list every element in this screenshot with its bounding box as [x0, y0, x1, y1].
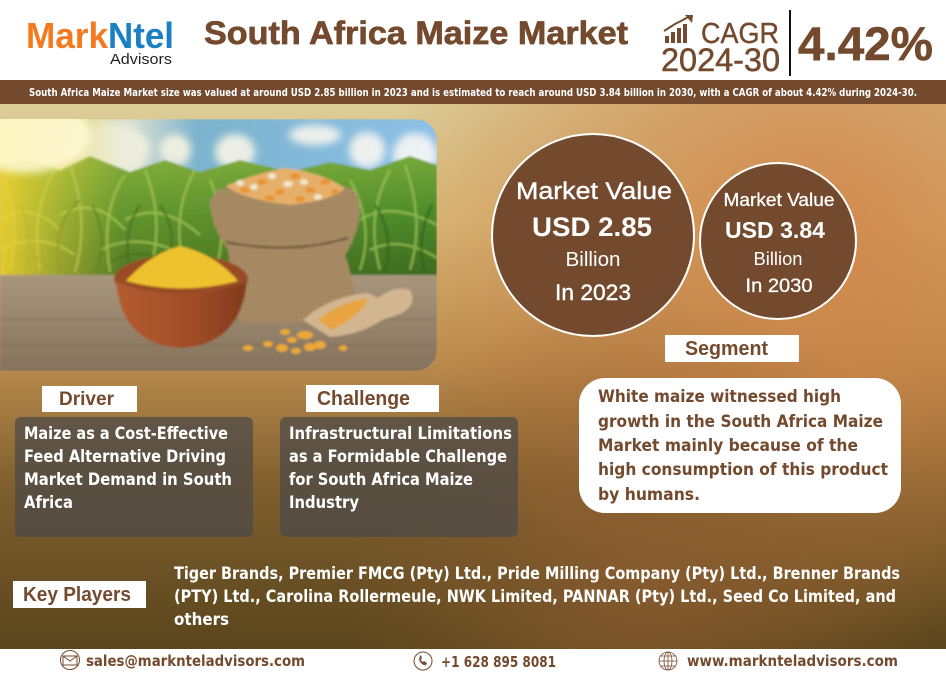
email address: sales@marknteladvisors.com [86, 652, 305, 670]
challenge panel: Industry [289, 493, 359, 513]
key players text: others [174, 610, 229, 630]
sack [210, 180, 360, 323]
photo: maize field, sack, bowl and scoop [0, 97, 437, 371]
bowl [113, 256, 249, 296]
logo: MarkNtel Advisors: Ntel [108, 15, 174, 56]
driver panel: Africa [24, 493, 73, 513]
driver panel [15, 417, 253, 537]
circle: market value 2030 [700, 163, 856, 319]
segment text panel: by humans. [598, 485, 700, 505]
logo: MarkNtel Advisors: Mark [26, 15, 109, 56]
footer [0, 649, 946, 674]
CAGR label: CAGR [701, 18, 779, 50]
challenge panel: for South Africa Maize [289, 470, 473, 490]
circle: market value 2023: Billion [566, 249, 620, 271]
challenge panel [280, 417, 518, 537]
circle: market value 2030: Billion [754, 249, 802, 269]
icon: globe [659, 652, 677, 670]
driver heading [42, 386, 137, 412]
segment heading: Segment [685, 338, 768, 360]
title: South Africa Maize Market [204, 15, 628, 51]
challenge heading: Challenge [317, 388, 410, 410]
CAGR block [661, 10, 933, 78]
segment text panel: high consumption of this product [598, 460, 888, 480]
circle: market value 2023: Market Value [516, 178, 672, 205]
icon: growth chart [664, 15, 693, 43]
key players heading: Key Players [23, 584, 131, 606]
segment text panel: growth in the South Africa Maize [598, 412, 883, 432]
circle: market value 2030: USD 3.84 [725, 217, 825, 243]
divider line [789, 10, 791, 76]
driver panel: Maize as a Cost-Effective [24, 424, 228, 444]
challenge panel: as a Formidable Challenge [289, 447, 507, 467]
driver panel: Feed Alternative Driving [24, 447, 226, 467]
icon: email [60, 650, 80, 670]
CAGR value: 4.42% [798, 17, 933, 70]
key players heading [13, 581, 146, 608]
logo: MarkNtel Advisors: Advisors [110, 51, 172, 68]
challenge panel: Infrastructural Limitations [289, 424, 512, 444]
scoop and kernels [303, 289, 412, 337]
challenge heading [306, 385, 439, 412]
segment text panel: Market mainly because of the [598, 436, 858, 456]
segment text panel [579, 378, 901, 513]
circle: market value 2023: USD 2.85 [532, 212, 652, 242]
summary band [0, 80, 946, 104]
icon: phone [414, 652, 432, 670]
website: www.marknteladvisors.com [687, 652, 898, 670]
circle: market value 2030: Market Value [724, 190, 834, 210]
logo: MarkNtel Advisors [26, 15, 174, 68]
CAGR period: 2024-30 [661, 42, 780, 78]
segment text panel: White maize witnessed high [598, 387, 841, 407]
driver panel: Market Demand in South [24, 470, 232, 490]
segment heading [665, 335, 799, 362]
circle: market value 2023: In 2023 [555, 280, 631, 305]
kernels in sack [226, 168, 345, 205]
driver heading: Driver [59, 389, 115, 410]
phone number: +1 628 895 8081 [441, 653, 556, 671]
circle: market value 2030: In 2030 [746, 276, 812, 297]
circle: market value 2023 [492, 134, 694, 336]
